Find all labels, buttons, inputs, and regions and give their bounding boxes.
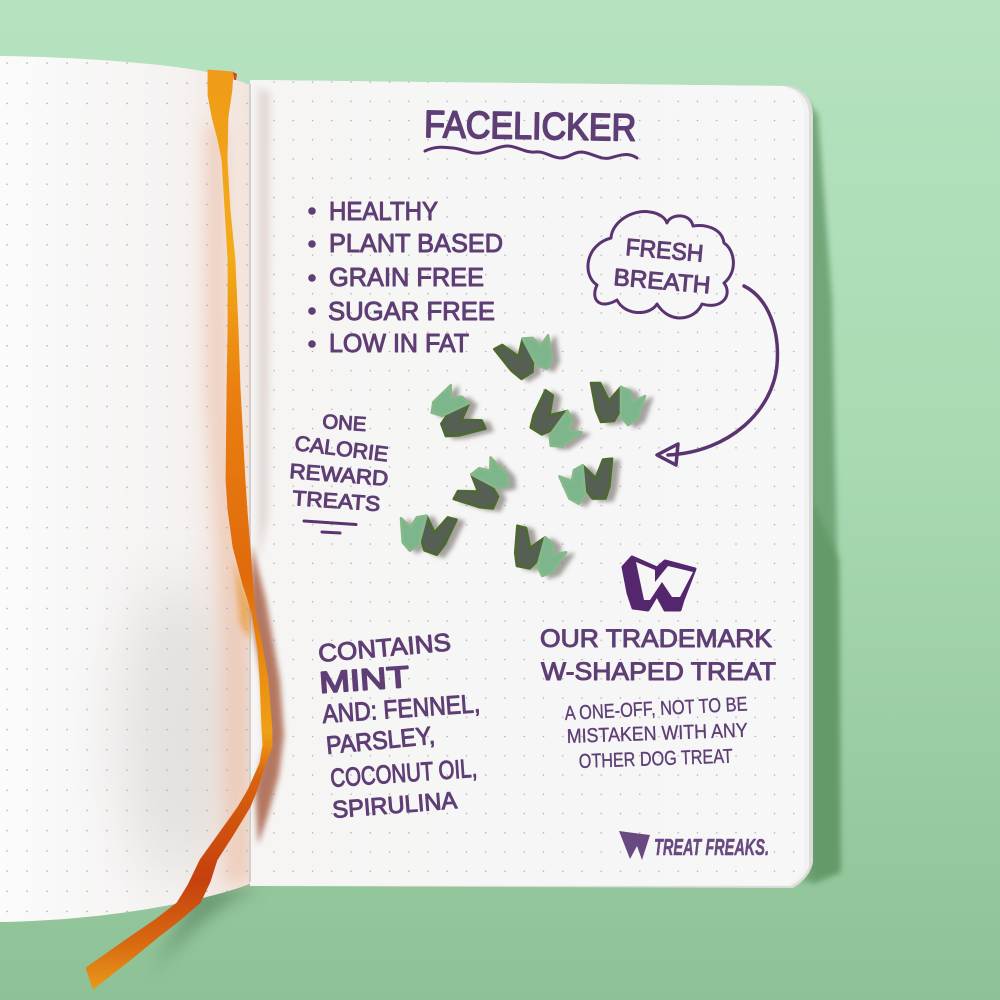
description text [564, 693, 748, 773]
treat 4 [591, 383, 645, 425]
left page [0, 56, 252, 922]
bullet list: benefits: PLANT BASED [329, 228, 503, 258]
cloud text: fresh breath: BREATH [612, 264, 711, 299]
bullet list: benefits: GRAIN FREE [329, 262, 484, 292]
title: FACELICKER [424, 104, 637, 150]
note: one calorie reward treats: TREATS [292, 487, 381, 516]
heading: our trademark W-shaped treat: W-SHAPED TREAT [541, 658, 776, 686]
ingredients note: COCONUT OIL, [329, 753, 478, 793]
brand logo: treat freaks: TREAT FREAKS. [654, 834, 769, 860]
description text: A ONE-OFF, NOT TO BE [564, 693, 748, 725]
bullet list: benefits: SUGAR FREE [328, 296, 495, 326]
ingredients note [317, 628, 481, 824]
note: one calorie reward treats: CALORIE [293, 432, 389, 466]
bullet list: benefits: LOW IN FAT [329, 328, 469, 358]
title wavy underline [425, 146, 637, 158]
treat 8 [506, 526, 570, 580]
right page with stacked edges [250, 80, 813, 888]
treat 2 [425, 380, 485, 446]
note: one calorie reward treats: REWARD [289, 460, 389, 491]
ingredients note: SPIRULINA [331, 787, 458, 824]
treat 1 [494, 324, 562, 386]
description text: MISTAKEN WITH ANY [566, 720, 748, 748]
note: one calorie reward treats: ONE [322, 411, 367, 436]
ingredients note: CONTAINS [317, 628, 452, 668]
heading: our trademark W-shaped treat [540, 625, 776, 686]
ingredients note: MINT [318, 661, 410, 700]
bullet list: benefits [308, 196, 503, 358]
ingredients note: PARSLEY, [325, 722, 436, 760]
ribbon glow below twist [234, 560, 250, 640]
treat 7 [393, 506, 457, 560]
notebook shadow [150, 100, 840, 975]
icon: trademark W logo [623, 557, 695, 610]
cloud text: fresh breath: FRESH [624, 234, 705, 268]
brand logo: treat freaks [619, 831, 769, 860]
bullet list: benefits: HEALTHY [329, 196, 438, 226]
ingredients note: AND: FENNEL, [321, 688, 481, 729]
note: one calorie reward treats [289, 411, 389, 533]
treat 3 [521, 390, 589, 456]
description text: OTHER DOG TREAT [578, 746, 733, 773]
spine fold and page curl shadow [250, 84, 270, 882]
treat 5 [454, 451, 516, 519]
icon: thought cloud [588, 212, 733, 318]
arrow from cloud to treats [657, 286, 777, 465]
ribbon bookmark [86, 70, 272, 989]
treat 6 [558, 459, 616, 505]
cloud text: fresh breath [612, 234, 711, 299]
heading: our trademark W-shaped treat: OUR TRADEMARK [540, 625, 772, 653]
ribbon shadow on page [250, 545, 284, 845]
